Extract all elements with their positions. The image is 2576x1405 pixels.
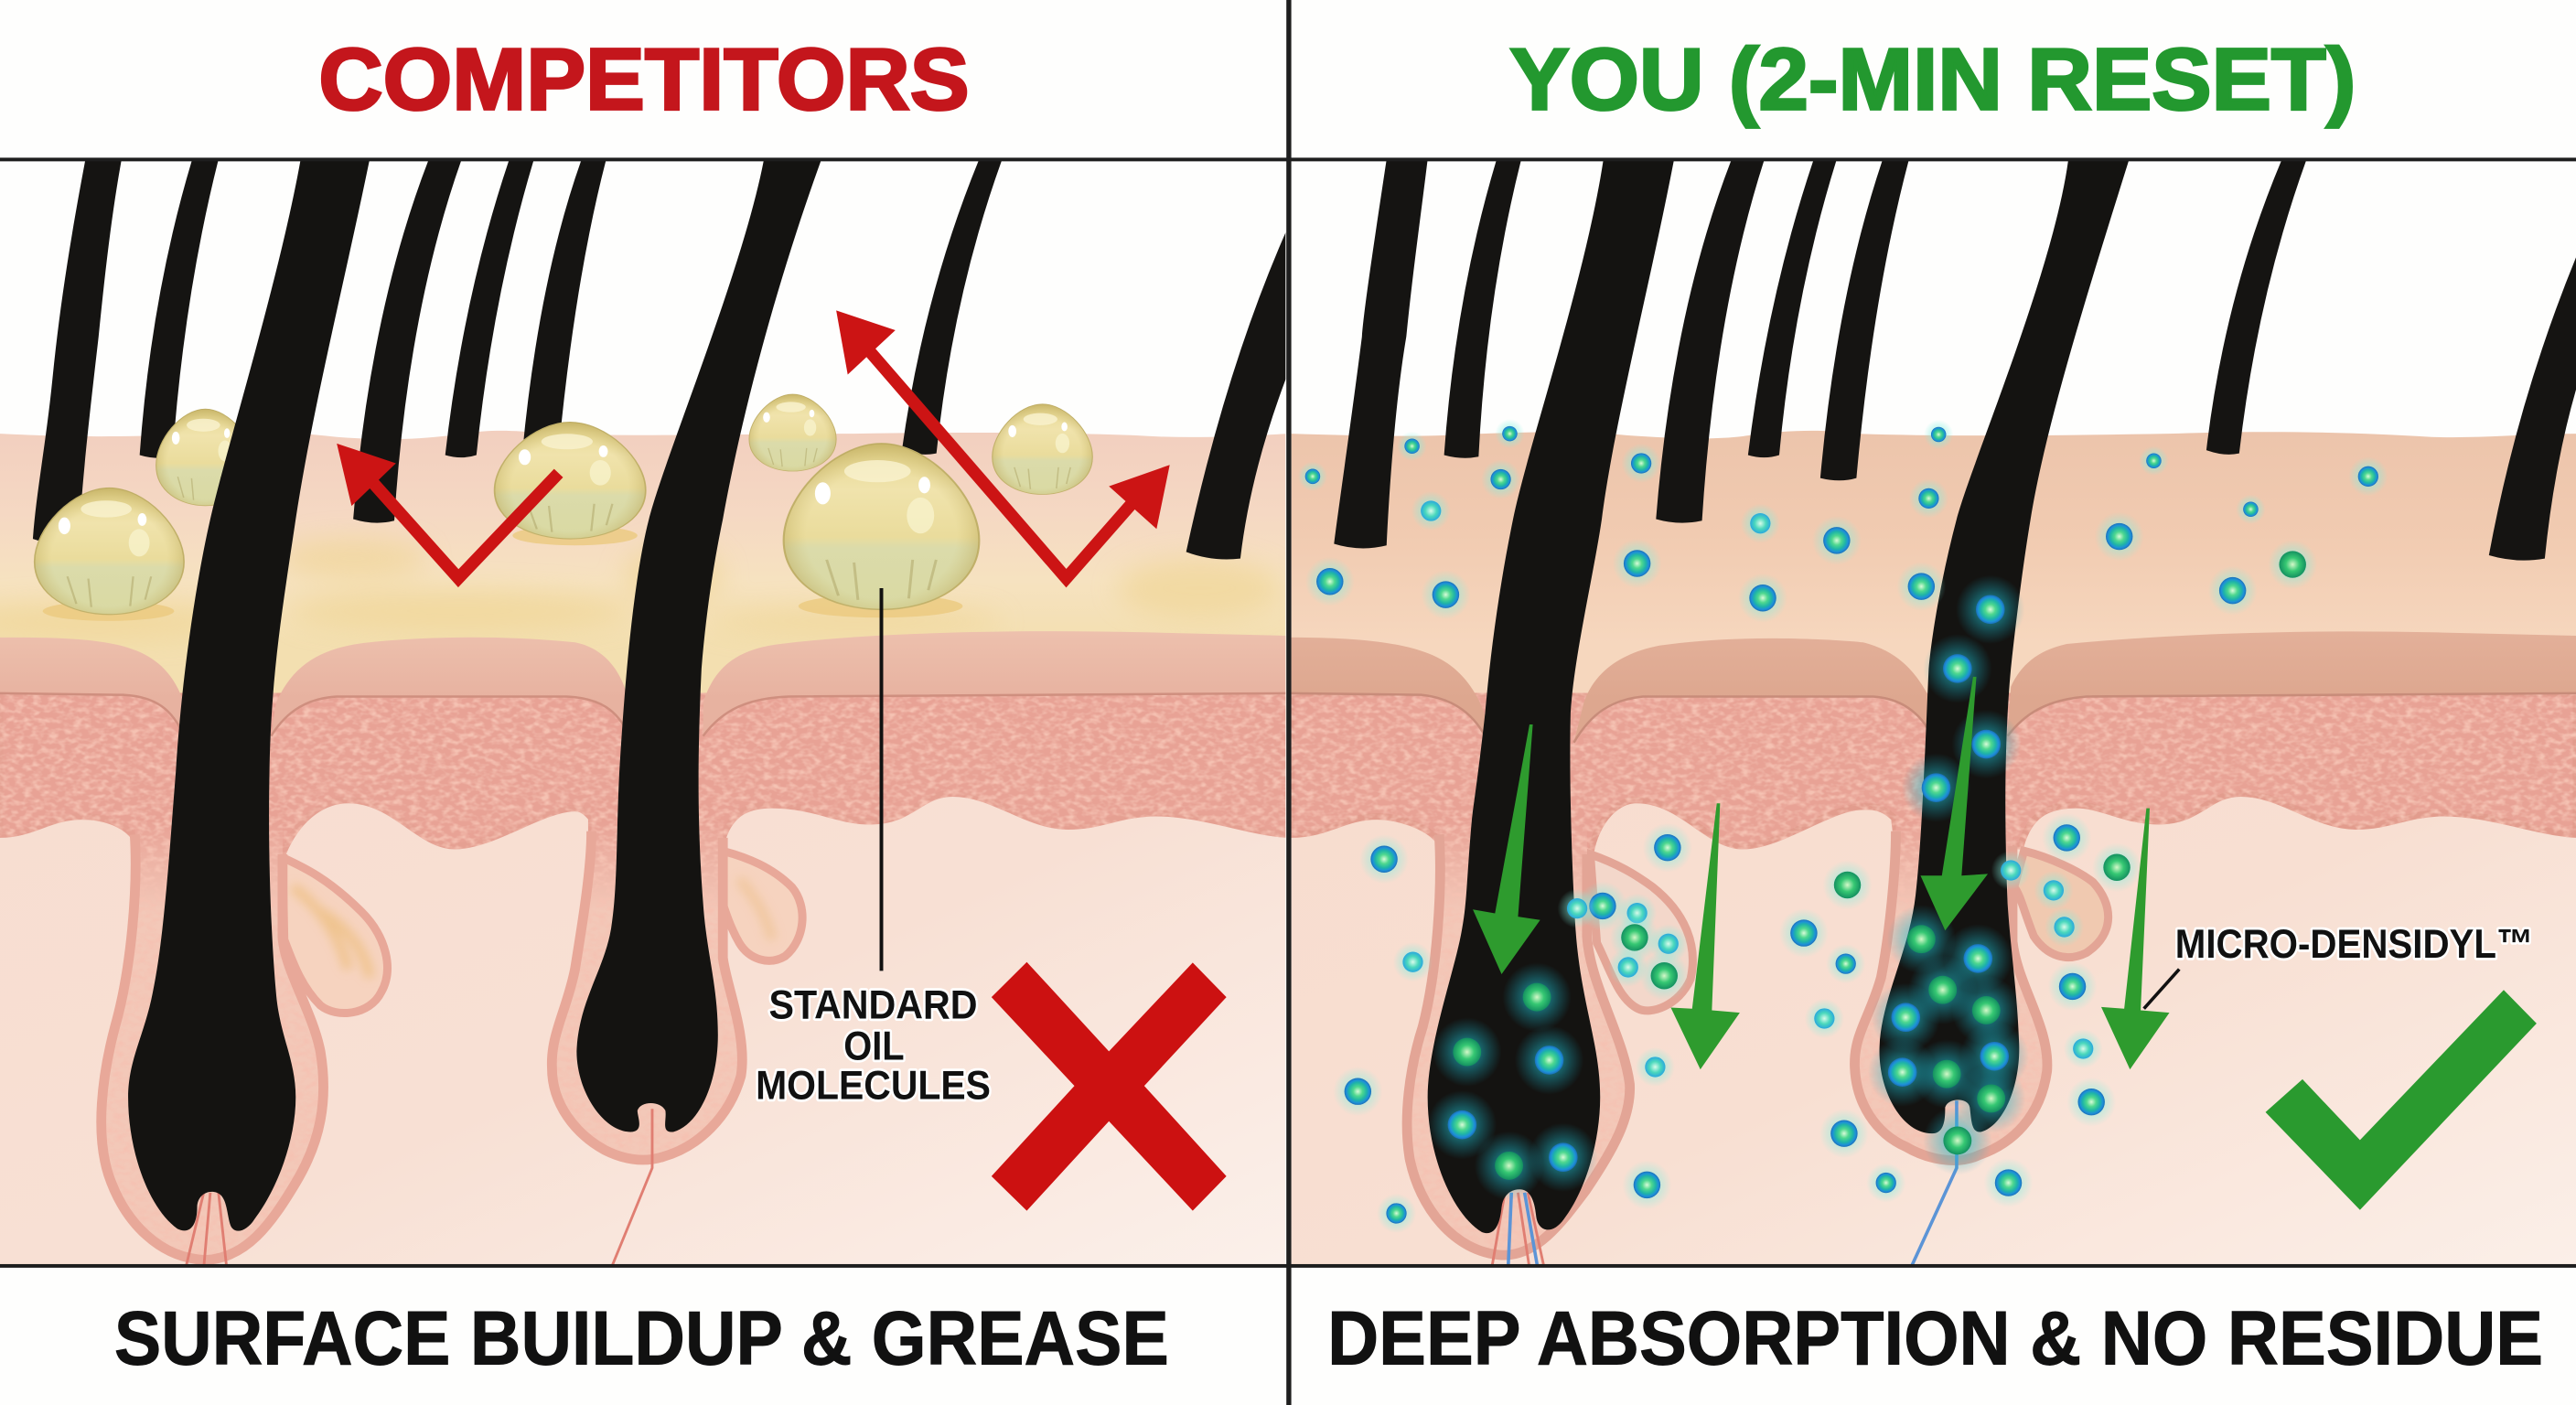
green arrow: beside follicle 1 [1670, 803, 1740, 1069]
epidermis band segments [0, 631, 1288, 736]
callout leader line [2144, 970, 2179, 1009]
nerve fibres [186, 1109, 652, 1268]
title: you (2-min reset): YOU (2-MIN RESET) [1509, 31, 2356, 128]
hypodermis background [0, 690, 1286, 1265]
follicle 2 with sebaceous gland [552, 818, 802, 1160]
green arrow: into follicle 1 [1473, 724, 1540, 974]
nanoparticles glowing inside hair shafts [1428, 575, 2029, 1200]
dermis layer [0, 693, 1288, 854]
label: standard oil molecules: STANDARD [768, 981, 978, 1027]
green arrow: into follicle 2 [1920, 677, 1988, 930]
epidermis lower edge [0, 693, 1288, 736]
dermis layer [1292, 693, 2576, 854]
label: micro-densidyl: MICRO-DENSIDYL™ [2175, 920, 2533, 967]
nanoparticles in deep tissue [1333, 813, 2141, 1233]
caption: surface buildup and grease: SURFACE BUILDUP & GREASE [114, 1295, 1169, 1381]
large hair 2 with bulb [576, 159, 821, 1132]
follicle 1 with sebaceous gland [102, 821, 387, 1260]
nerve fibres [1492, 1193, 1544, 1268]
small background hairs [33, 159, 1298, 560]
epidermis lower edge [1292, 693, 2576, 743]
oil molecule droplets [35, 394, 1092, 621]
label: standard oil molecules: OIL [843, 1022, 905, 1068]
red arrow: long bounce [836, 310, 1170, 578]
nanoparticles on skin surface [1298, 419, 2388, 623]
green arrow: beside follicle 2 [2101, 809, 2170, 1069]
label: standard oil molecules: MOLECULES [756, 1061, 991, 1108]
panel: competitors skin cross-section [0, 159, 1298, 1268]
follicle 1 with sebaceous gland [1407, 821, 1692, 1255]
skin surface [0, 431, 1288, 723]
large hair 2 with bulb [1880, 159, 2130, 1133]
panel: you skin cross-section [1292, 159, 2576, 1268]
icon: red cross [992, 962, 1227, 1211]
hypodermis background [1292, 797, 2576, 1264]
label: standard oil molecules [756, 981, 991, 1108]
callout leader line [880, 588, 883, 971]
grease buildup patches [0, 539, 1282, 639]
small background hairs [1334, 159, 2576, 561]
follicle 2 with sebaceous gland [1854, 818, 2109, 1161]
icon: green check mark [2266, 990, 2537, 1210]
title: competitors: COMPETITORS [318, 31, 970, 128]
skin surface [1292, 430, 2576, 693]
epidermis band segments [1292, 631, 2576, 743]
red arrow: short bounce [337, 444, 559, 578]
large hair 1 with bulb [1428, 159, 1674, 1233]
large hair 1 with bulb [128, 159, 370, 1231]
nanoparticles in sebaceous glands [1558, 851, 2084, 1001]
